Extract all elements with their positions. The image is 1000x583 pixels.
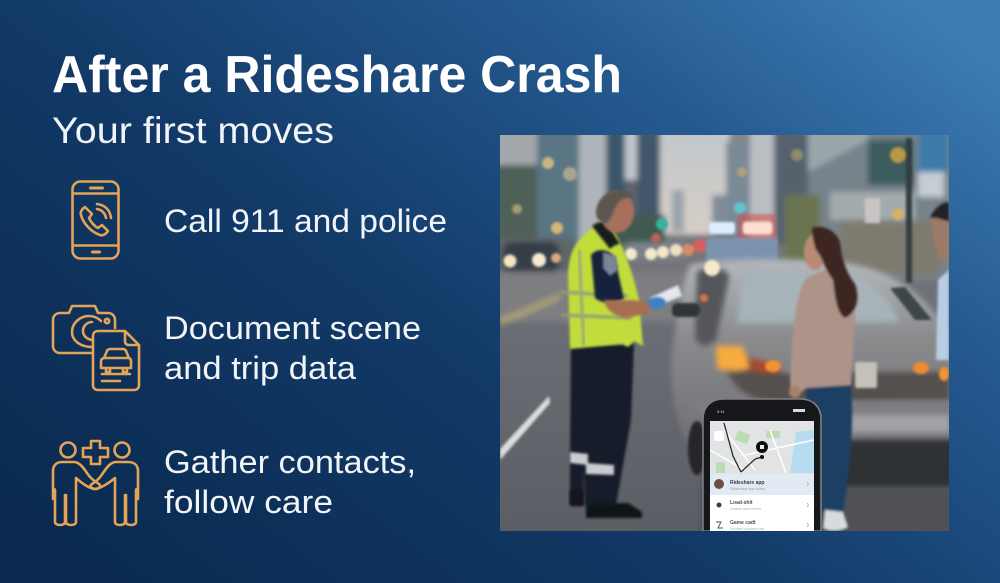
title: After a Rideshare Crash (52, 46, 622, 104)
step 2 label: and trip data (164, 350, 356, 386)
app list rows: Rideshare app (730, 480, 764, 486)
app list rows: Details and review (730, 507, 761, 511)
step 3 label: Gather contacts, (164, 444, 416, 480)
step 3 label (164, 444, 416, 520)
app list rows: Load-shit (730, 500, 753, 506)
icon: camera and car document (53, 306, 139, 390)
right man (930, 202, 949, 360)
step 3 label: follow care (164, 484, 333, 520)
silver car (671, 259, 965, 488)
map (710, 421, 814, 475)
officer (560, 190, 682, 518)
left road and cars (497, 242, 692, 326)
phone status bar: 9:41 (717, 409, 726, 414)
phone showing rideshare app (703, 399, 821, 531)
app list rows: Game cadt (730, 520, 756, 526)
police car lights (706, 214, 778, 262)
app list rows: Incident contact info (730, 527, 764, 531)
bokeh street and traffic lights (504, 147, 906, 268)
step 2 label: Document scene (164, 310, 421, 346)
icon: two people and medical cross (53, 441, 138, 525)
subtitle: Your first moves (52, 110, 334, 151)
app list rows: Rideshare app today (730, 487, 765, 491)
city background (495, 130, 953, 280)
woman (789, 227, 857, 531)
step 2 label (164, 310, 421, 386)
step 1 label: Call 911 and police (164, 203, 447, 239)
app list rows (710, 474, 814, 531)
photo: officer and woman at crash scene (495, 130, 965, 538)
icon: smartphone call (72, 182, 118, 258)
